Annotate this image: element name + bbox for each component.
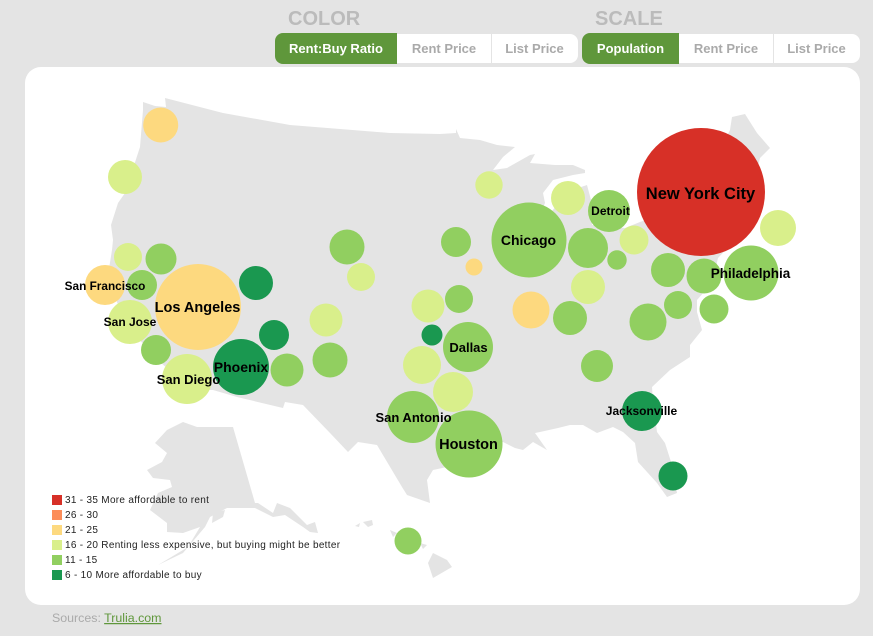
scale button group: Rent Price bbox=[694, 41, 758, 56]
color button group: Rent Price bbox=[412, 41, 476, 56]
scale button group bbox=[582, 33, 860, 64]
city labels: Phoenix bbox=[214, 359, 268, 375]
city labels: Chicago bbox=[501, 232, 556, 248]
city labels: Detroit bbox=[591, 204, 630, 218]
map: Kodiak bbox=[212, 510, 225, 523]
city labels: San Jose bbox=[104, 315, 157, 329]
map: Hawaii islands bbox=[355, 520, 452, 578]
color button group: Rent:Buy Ratio bbox=[289, 41, 383, 56]
city labels: Philadelphia bbox=[711, 266, 791, 281]
scale button group: List Price bbox=[787, 41, 846, 56]
map: Alaska bbox=[147, 422, 318, 565]
city labels: New York City bbox=[646, 185, 756, 203]
legend: 26 - 30 bbox=[65, 510, 98, 521]
city labels: Dallas bbox=[449, 340, 488, 355]
heading: color: COLOR bbox=[288, 8, 361, 30]
scale button group: Population bbox=[597, 41, 664, 56]
legend bbox=[52, 495, 341, 581]
city labels: Jacksonville bbox=[606, 404, 678, 418]
legend: 31 - 35 More affordable to rent bbox=[65, 495, 209, 506]
map: contiguous states bbox=[108, 98, 770, 503]
city labels: San Antonio bbox=[375, 410, 452, 425]
color button group bbox=[275, 33, 578, 64]
city labels: Houston bbox=[439, 437, 498, 453]
map: United States base bbox=[108, 98, 770, 578]
bubbles: metro areas bbox=[85, 108, 796, 554]
sources: Sources: Trulia.com bbox=[52, 611, 162, 625]
legend: 6 - 10 More affordable to buy bbox=[65, 570, 202, 581]
legend: 11 - 15 bbox=[65, 555, 98, 566]
color button group: List Price bbox=[505, 41, 564, 56]
city labels: Los Angeles bbox=[155, 300, 240, 316]
city labels bbox=[65, 185, 791, 453]
city labels: San Francisco bbox=[65, 279, 145, 293]
legend: 21 - 25 bbox=[65, 525, 98, 536]
legend: 16 - 20 Renting less expensive, but buying might be better bbox=[65, 540, 341, 551]
city labels: San Diego bbox=[157, 372, 220, 387]
heading: scale: SCALE bbox=[595, 8, 663, 30]
